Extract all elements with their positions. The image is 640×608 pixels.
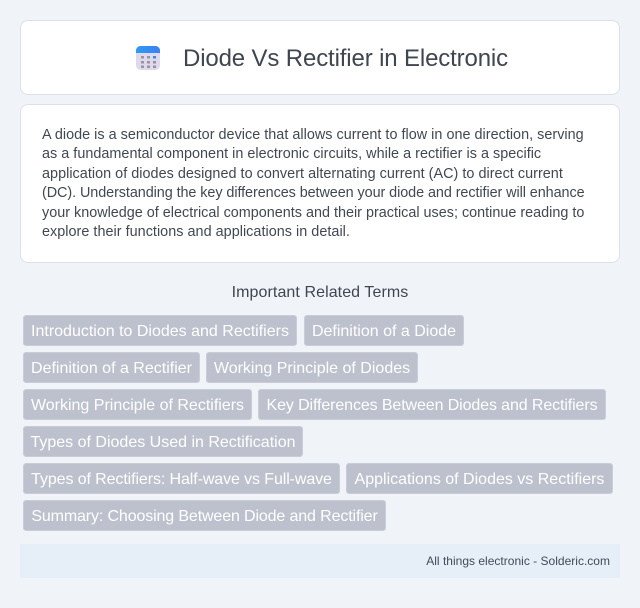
description text: A diode is a semiconductor device that allows current to flow in one direction, serving [42,127,584,143]
title card [20,20,620,95]
heading: Diode Vs Rectifier in Electronic [183,45,508,72]
description text: your knowledge of electrical components and their practical uses; continue reading to [42,205,584,221]
chips: related terms: Key Differences Between Diodes and Rectifiers [267,397,597,414]
chips: related terms: Definition of a Rectifier [31,360,192,377]
footer text: All things electronic - Solderic.com [426,554,610,568]
section heading: related terms: Important Related Terms [232,284,408,301]
panel: description [20,104,620,263]
chips: related terms [23,315,613,531]
chips: related terms: Working Principle of Diodes [214,360,410,377]
chips: related terms: Introduction to Diodes and Rectifiers [31,323,289,340]
description text: as a fundamental component in electronic circuits, while a rectifier is a specific [42,146,541,162]
description text: (DC). Understanding the key differences between your diode and rectifier will enhance [42,185,585,201]
chips: related terms: Types of Rectifiers: Half-wave vs Full-wave [31,471,332,488]
chips: related terms: Working Principle of Rectifiers [31,397,244,414]
icon: calendar grid [136,46,160,70]
description text: application of diodes designed to convert alternating current (AC) to direct current [42,166,563,182]
chips: related terms: Applications of Diodes vs Rectifiers [355,471,604,488]
description text: explore their functions and applications in detail. [42,224,350,240]
chips: related terms: Types of Diodes Used in Rectification [30,434,296,451]
chips: related terms: Definition of a Diode [312,323,456,340]
description text [42,127,585,240]
chips: related terms: Summary: Choosing Between Diode and Rectifier [31,508,378,525]
footer bar [20,544,620,578]
